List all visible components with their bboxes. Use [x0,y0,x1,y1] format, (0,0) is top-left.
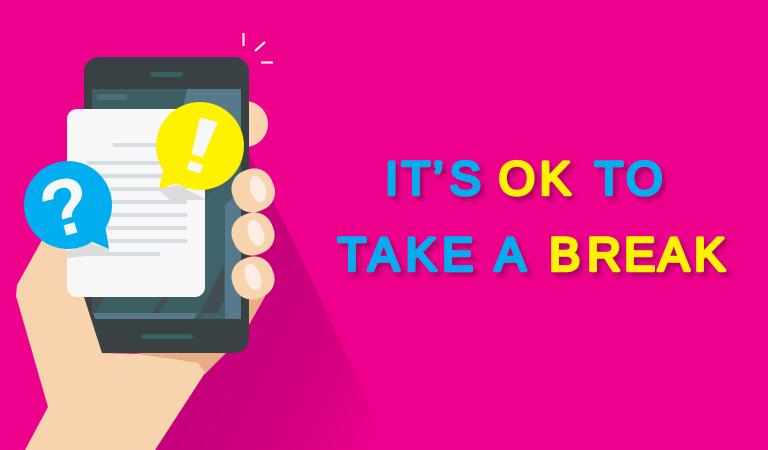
phone screen [92,89,241,319]
document card [67,109,205,297]
palm and wrist [16,200,205,450]
icon: exclamation speech bubble [156,102,244,190]
heading: IT'S OK TO TAKE A BREAK: BREAK [549,228,725,280]
heading: IT'S OK TO TAKE A BREAK: TAKE [338,228,473,280]
icon: question speech bubble: ? [30,158,102,257]
heading: IT'S OK TO TAKE A BREAK: A [494,228,526,280]
hand shadow tone under phone [135,353,226,374]
fingers [226,163,281,305]
heading: IT'S OK TO TAKE A BREAK: TO [594,152,663,204]
phone speaker [150,72,183,77]
hand shadow tone by lower finger [240,293,267,325]
upper finger behind phone [222,101,268,147]
heading: IT'S OK TO TAKE A BREAK: OK [498,152,571,204]
phone body [84,57,249,353]
icon: alert sparks [244,33,273,62]
phone home bar [141,334,193,339]
long shadow of hand [153,153,390,450]
illustration: hand holding phone [16,57,281,450]
heading: IT'S OK TO TAKE A BREAK: IT’S [385,152,481,204]
heading: IT'S OK TO TAKE A BREAK [338,152,725,280]
